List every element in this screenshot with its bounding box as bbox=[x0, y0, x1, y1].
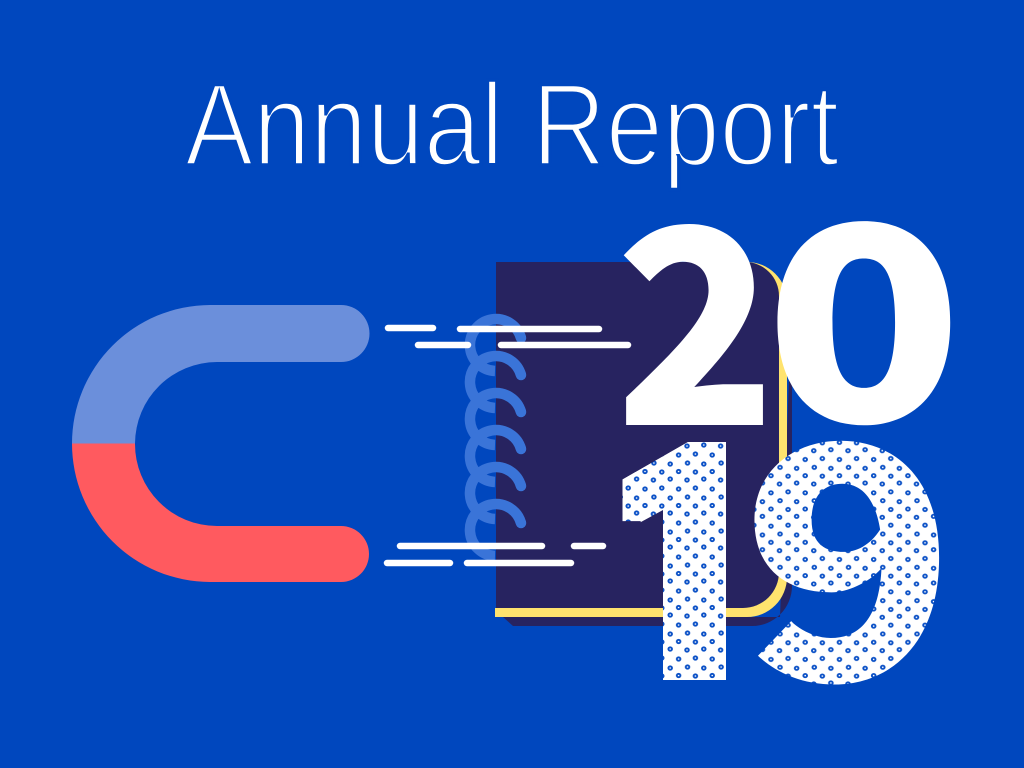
digit 9: 9 bbox=[741, 305, 956, 768]
digit 2: 2 bbox=[615, 111, 776, 504]
spiral binding bbox=[470, 319, 526, 556]
notebook yellow edge bbox=[495, 262, 787, 617]
speed lines: top bbox=[388, 328, 628, 345]
icon: notebook bbox=[495, 262, 792, 626]
magnet upper arm bbox=[72, 305, 370, 444]
year: 19 dotted bbox=[622, 440, 940, 684]
speed lines: bottom bbox=[387, 546, 603, 563]
infographic canvas bbox=[72, 82, 950, 684]
year: 20 bbox=[615, 107, 964, 504]
notebook cover bbox=[496, 262, 779, 608]
digit 0: 0 bbox=[764, 107, 964, 500]
notebook shadow bbox=[503, 300, 792, 626]
magnet lower arm bbox=[72, 444, 369, 582]
icon: horseshoe magnet bbox=[72, 305, 370, 582]
digit 1: 1 bbox=[582, 299, 793, 768]
title: Annual Report bbox=[185, 59, 839, 190]
